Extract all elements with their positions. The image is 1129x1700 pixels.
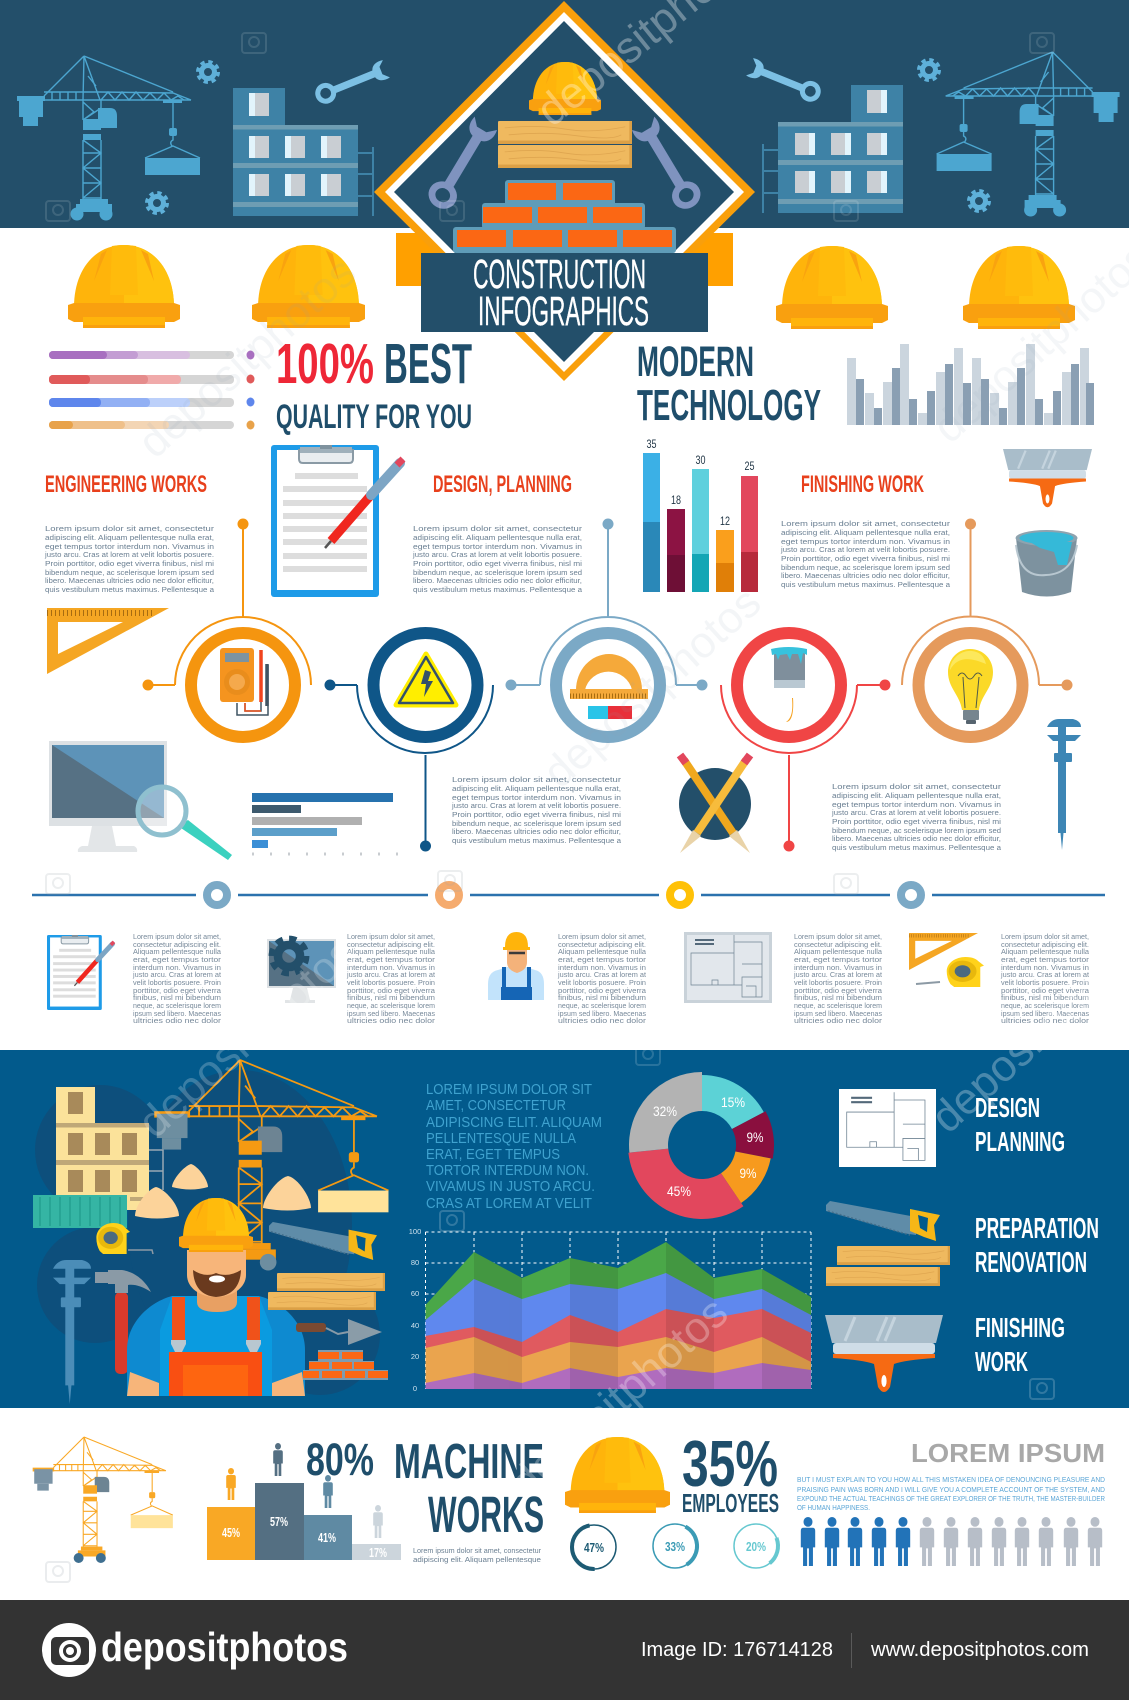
text column 3: ipsum sed libero. Maecenas: [558, 1011, 647, 1018]
icon: caliper: [53, 1260, 91, 1404]
text column 2: consectetur adipiscing elit.: [347, 942, 435, 949]
text column 2: ipsum sed libero. Maecenas: [347, 1011, 436, 1018]
icon: left tower crane: [17, 56, 200, 220]
text column 3: [557, 934, 647, 1025]
heading: 100% best quality for you: BEST: [384, 332, 472, 396]
text column 5: Lorem ipsum dolor sit amet,: [1001, 934, 1089, 941]
heading: modern technology: TECHNOLOGY: [637, 381, 821, 430]
text block: design planning: adipiscing elit. Aliquam pellentesque nulla erat,: [413, 533, 582, 542]
text block: blue paragraph: LOREM IPSUM DOLOR SIT: [426, 1082, 592, 1098]
text block: blue paragraph: PELLENTESQUE NULLA: [426, 1131, 576, 1147]
icon: planks: [268, 1273, 385, 1310]
text column 3: consectetur adipiscing elit.: [558, 942, 646, 949]
text column 3: ultricies odio nec dolor: [558, 1018, 647, 1025]
text column 3: erat, eget tempus tortor: [558, 957, 647, 964]
stacked bar chart: 18: [671, 493, 681, 507]
text block: finishing work: Proin porttitor, odio eget viverra finibus, nisl mi: [781, 554, 950, 563]
ring gauge 33%: [645, 1516, 705, 1576]
text column 4: Aliquam pellentesque nulla: [794, 949, 882, 956]
icon: clipboard with pen: [271, 445, 403, 597]
icon: bottom crane: [33, 1437, 173, 1563]
label: preparation renovation: [975, 1213, 1099, 1279]
text block: lower centre: libero. Maecenas ultricies odio nec dolor efficitur,: [452, 827, 621, 836]
text block: design planning: Lorem ipsum dolor sit amet, consectetur: [413, 524, 583, 533]
text block: finishing work: quis vestibulum metus maximus. Pellentesque a: [781, 580, 951, 589]
text block: design planning: quis vestibulum metus maximus. Pellentesque a: [413, 585, 583, 594]
icon: hammer: [95, 1270, 151, 1374]
text column 4: finibus, nisl mi bibendum: [794, 995, 882, 1002]
text block: blue small caps: OF HUMAN HAPPINESS.: [797, 1503, 870, 1512]
text column 1: neque, ac scelerisque lorem: [133, 1003, 221, 1010]
text block: lower centre: [451, 775, 622, 845]
text column 5: ultricies odio nec dolor: [1001, 1018, 1090, 1025]
icon: hard hat 4: [963, 246, 1075, 329]
icon: monitor with gear: [267, 939, 336, 1003]
icon: planks right: [826, 1246, 950, 1286]
text block: design planning: Proin porttitor, odio eget viverra finibus, nisl mi: [413, 559, 582, 568]
icon: left building: [233, 88, 373, 216]
text column 1: justo arcu. Cras at lorem at: [132, 972, 221, 979]
footer logo: [42, 1623, 348, 1677]
circle node 4: paint brush: [721, 633, 890, 852]
text column 1: Aliquam pellentesque nulla: [133, 949, 221, 956]
watermark texts: depositphotos: [501, 1288, 737, 1507]
text block: lower right: adipiscing elit. Aliquam pellentesque nulla erat,: [832, 791, 1001, 800]
text column 2: velit lobortis posuere. Proin: [347, 980, 435, 987]
icon: orange crane: [154, 1060, 388, 1271]
text block: blue paragraph: TORTOR INTERDUM NON.: [426, 1163, 589, 1179]
panel: blue section: [0, 1050, 1129, 1408]
text column 5: finibus, nisl mi bibendum: [1001, 995, 1089, 1002]
text column 1: consectetur adipiscing elit.: [133, 942, 221, 949]
circle node 3: protractor: [506, 518, 708, 737]
icon: small clipboard: [47, 935, 114, 1010]
circle node 5: light bulb: [902, 518, 1072, 737]
text column 5: erat, eget tempus tortor: [1001, 957, 1090, 964]
stacked area chart: 40: [411, 1321, 419, 1330]
label: design planning: DESIGN: [975, 1092, 1040, 1123]
text column 4: Lorem ipsum dolor sit amet,: [794, 934, 882, 941]
text block: finishing work: libero. Maecenas ultricies odio nec dolor efficitur,: [781, 571, 950, 580]
text column 1: velit lobortis posuere. Proin: [133, 980, 221, 987]
heading: modern technology: [637, 338, 821, 430]
stacked bar chart: [643, 437, 758, 592]
text column 2: justo arcu. Cras at lorem at: [346, 972, 435, 979]
icon: right wrench: [746, 58, 821, 103]
text column 2: erat, eget tempus tortor: [347, 957, 436, 964]
skyline bar chart: [847, 344, 1094, 425]
icon: yellow building: [56, 1087, 163, 1210]
text column 3: Aliquam pellentesque nulla: [558, 949, 646, 956]
footer logo: depositphotos: [101, 1624, 348, 1670]
icon: badge hard hat: [529, 62, 601, 115]
panel: header band: [0, 0, 1129, 228]
icon: worker figure: [127, 1198, 305, 1396]
text block: lower right: libero. Maecenas ultricies odio nec dolor efficitur,: [832, 834, 1001, 843]
text column 4: interdum non. Vivamus in: [794, 965, 882, 972]
text column 2: neque, ac scelerisque lorem: [347, 1003, 435, 1010]
text column 5: [1000, 934, 1090, 1025]
step bar chart with people: 45%: [222, 1526, 240, 1540]
text block: finishing work: adipiscing elit. Aliquam pellentesque nulla erat,: [781, 528, 950, 537]
text block: engineering works: eget tempus tortor interdum non. Vivamus in: [45, 542, 214, 551]
icon: floor plan: [684, 932, 772, 1003]
icon: worker bust: [488, 932, 544, 1000]
label: design planning: PLANNING: [975, 1126, 1065, 1157]
text column 4: porttitor, odio eget viverra: [794, 988, 882, 995]
stacked area chart: [409, 1227, 811, 1393]
stacked area chart: 20: [411, 1352, 419, 1361]
icon: hard hat 3: [776, 246, 888, 329]
ring gauge 47%: 47%: [584, 1540, 604, 1555]
stacked bar chart: 25: [744, 459, 755, 473]
icon: caliper: [1047, 719, 1081, 850]
icon: floor plan white: [839, 1089, 936, 1167]
stacked bar chart: 30: [696, 453, 706, 467]
text column 3: neque, ac scelerisque lorem: [558, 1003, 646, 1010]
text column 3: porttitor, odio eget viverra: [558, 988, 646, 995]
icon: right badge wrench: [631, 116, 703, 211]
heading: finishing work: FINISHING WORK: [801, 471, 924, 498]
text column 4: consectetur adipiscing elit.: [794, 942, 882, 949]
icon: tape measure: [96, 1223, 153, 1254]
text block: machine works caption: [413, 1546, 541, 1564]
heading: 35% employees: [682, 1427, 779, 1518]
title banner: CONSTRUCTION: [473, 251, 646, 297]
stacked bar chart: 12: [720, 514, 730, 528]
text block: lower centre: quis vestibulum metus maximus. Pellentesque a: [452, 836, 622, 845]
label: finishing work: WORK: [975, 1346, 1028, 1377]
text column 4: erat, eget tempus tortor: [794, 957, 883, 964]
icon: set square ruler: [47, 608, 169, 674]
step bar chart with people: 57%: [270, 1515, 288, 1529]
text column 4: justo arcu. Cras at lorem at: [793, 972, 882, 979]
icon: paint scraper right: [825, 1315, 943, 1392]
horizontal bar chart: [252, 793, 402, 854]
text block: lower centre: justo arcu. Cras at lorem at velit lobortis posuere.: [451, 801, 621, 810]
text block: finishing work: [780, 519, 951, 589]
icon: paint scraper: [1003, 449, 1092, 507]
text block: engineering works: libero. Maecenas ultricies odio nec dolor efficitur,: [45, 576, 214, 585]
title banner: INFOGRAPHICS: [478, 288, 649, 334]
text block: blue small caps: [797, 1475, 1106, 1512]
text column 2: interdum non. Vivamus in: [347, 965, 435, 972]
ring gauge 20%: 20%: [746, 1539, 766, 1554]
text block: lower centre: Proin porttitor, odio eget viverra finibus, nisl mi: [452, 810, 621, 819]
text block: machine works caption: Lorem ipsum dolor sit amet, consectetur: [413, 1546, 541, 1555]
icon: left wrench: [315, 60, 390, 105]
text column 1: porttitor, odio eget viverra: [133, 988, 221, 995]
text column 3: Lorem ipsum dolor sit amet,: [558, 934, 646, 941]
text column 2: porttitor, odio eget viverra: [347, 988, 435, 995]
banner side brackets: [396, 233, 733, 286]
text block: lower centre: eget tempus tortor interdum non. Vivamus in: [452, 793, 621, 802]
circle node 2: electrical warning: [324, 633, 493, 852]
heading: 100% best quality for you: 100%: [276, 332, 374, 396]
text column 1: ipsum sed libero. Maecenas: [133, 1011, 222, 1018]
text block: lower centre: Lorem ipsum dolor sit amet, consectetur: [452, 775, 622, 784]
text column 1: interdum non. Vivamus in: [133, 965, 221, 972]
heading: 80% machine works: [306, 1434, 544, 1543]
text column 4: ipsum sed libero. Maecenas: [794, 1011, 883, 1018]
text column 5: justo arcu. Cras at lorem at: [1000, 972, 1089, 979]
watermark texts: depositphotos: [129, 928, 365, 1147]
text column 3: justo arcu. Cras at lorem at: [557, 972, 646, 979]
heading: 80% machine works: MACHINE: [394, 1435, 544, 1489]
panel: footer bar: [0, 1600, 1129, 1700]
text block: lower right: Proin porttitor, odio eget viverra finibus, nisl mi: [832, 817, 1001, 826]
heading: 80% machine works: 80%: [306, 1434, 374, 1485]
heading: 35% employees: 35%: [682, 1427, 778, 1500]
people pictogram row: [801, 1517, 1102, 1566]
text column 5: porttitor, odio eget viverra: [1001, 988, 1089, 995]
donut chart: 15%: [721, 1094, 745, 1110]
icon: hard hat 1: [68, 245, 180, 328]
text column 5: velit lobortis posuere. Proin: [1001, 980, 1089, 987]
title banner: [421, 251, 708, 334]
footer image id: Image ID: 176714128: [641, 1639, 833, 1661]
icon: left badge wrench: [426, 116, 498, 211]
text column 5: interdum non. Vivamus in: [1001, 965, 1089, 972]
stacked area chart: 0: [413, 1384, 417, 1393]
icon: right tower crane: [937, 52, 1120, 216]
icon: teal container: [33, 1195, 127, 1228]
text column 4: velit lobortis posuere. Proin: [794, 980, 882, 987]
label: finishing work: [975, 1312, 1065, 1377]
text block: engineering works: [44, 524, 215, 594]
icon: paint bucket: [1016, 530, 1078, 596]
stacked bar chart: 35: [646, 437, 657, 451]
stacked area chart: 100: [409, 1227, 421, 1236]
text block: engineering works: Proin porttitor, odio eget viverra finibus, nisl mi: [45, 559, 214, 568]
heading: design, planning: DESIGN, PLANNING: [433, 471, 572, 498]
text column 2: Aliquam pellentesque nulla: [347, 949, 435, 956]
text block: design planning: [412, 524, 583, 594]
text column 4: neque, ac scelerisque lorem: [794, 1003, 882, 1010]
heading: 80% machine works: WORKS: [428, 1486, 544, 1543]
donut chart: 9%: [740, 1165, 756, 1181]
text block: finishing work: justo arcu. Cras at lorem at velit lobortis posuere.: [780, 545, 950, 554]
icon: monitor with magnifier: [49, 741, 232, 860]
circle node 1: multimeter: [142, 518, 311, 737]
icon: small brick pile: [303, 1350, 388, 1380]
text block: lower right: quis vestibulum metus maximus. Pellentesque a: [832, 843, 1002, 852]
text column 1: ultricies odio nec dolor: [133, 1018, 222, 1025]
step bar chart with people: [207, 1443, 401, 1560]
label: design planning: [975, 1092, 1065, 1157]
icon: sand piles: [135, 1164, 311, 1218]
heading: engineering works: ENGINEERING WORKS: [45, 471, 207, 498]
watermark texts: [129, 0, 1129, 1507]
icon: crossed pencils: [679, 755, 751, 853]
icon: left lower gear: [147, 193, 167, 213]
watermark texts: depositphotos: [129, 248, 365, 467]
text block: blue paragraph: CRAS AT LOREM AT VELIT: [426, 1196, 592, 1212]
text column 1: [132, 934, 222, 1025]
icon: hard hat 2: [252, 245, 365, 328]
text column 5: consectetur adipiscing elit.: [1001, 942, 1089, 949]
heading: 100% best quality for you: QUALITY FOR YOU: [276, 398, 472, 436]
donut chart: 45%: [667, 1183, 691, 1199]
donut chart: 32%: [653, 1103, 677, 1119]
text block: engineering works: justo arcu. Cras at lorem at velit lobortis posuere.: [44, 550, 214, 559]
text block: lower right: eget tempus tortor interdum non. Vivamus in: [832, 800, 1001, 809]
text column 2: Lorem ipsum dolor sit amet,: [347, 934, 435, 941]
text block: design planning: eget tempus tortor interdum non. Vivamus in: [413, 542, 582, 551]
timeline: [32, 885, 1105, 905]
text block: lower right: bibendum neque, ac scelerisque lorem ipsum sed: [832, 826, 1001, 835]
text column 2: ultricies odio nec dolor: [347, 1018, 436, 1025]
icon: saw: [269, 1222, 377, 1260]
text block: finishing work: bibendum neque, ac scelerisque lorem ipsum sed: [781, 563, 950, 572]
icon: brick pile: [453, 180, 676, 253]
text column 4: ultricies odio nec dolor: [794, 1018, 883, 1025]
icon: stacked planks: [498, 121, 632, 168]
text column 3: velit lobortis posuere. Proin: [558, 980, 646, 987]
text block: lower right: [831, 782, 1002, 852]
ring gauge 47%: [572, 1525, 616, 1569]
icon: right upper gear: [919, 60, 939, 80]
stacked area chart: 60: [411, 1289, 419, 1298]
text block: blue paragraph: ERAT, EGET TEMPUS: [426, 1147, 560, 1163]
icon: ruler and tape measure: [909, 933, 984, 987]
diamond badge: [374, 1, 755, 381]
donut chart: 9%: [746, 1129, 764, 1145]
text column 1: Lorem ipsum dolor sit amet,: [133, 934, 221, 941]
step bar chart with people: 17%: [369, 1546, 387, 1560]
text block: blue paragraph: ADIPISCING ELIT. ALIQUAM: [426, 1115, 602, 1131]
text block: design planning: bibendum neque, ac scelerisque lorem ipsum sed: [413, 568, 582, 577]
text block: blue paragraph: VIVAMUS IN JUSTO ARCU.: [426, 1179, 595, 1195]
icon: trowel: [296, 1319, 382, 1345]
label: finishing work: FINISHING: [975, 1312, 1065, 1343]
text column 4: [793, 934, 883, 1025]
heading: 35% employees: EMPLOYEES: [682, 1488, 779, 1518]
text block: finishing work: eget tempus tortor interdum non. Vivamus in: [781, 537, 950, 546]
text column 3: finibus, nisl mi bibendum: [558, 995, 646, 1002]
text block: lower right: justo arcu. Cras at lorem at velit lobortis posuere.: [831, 808, 1001, 817]
icon: right building: [763, 85, 903, 213]
icon: left upper gear: [198, 62, 218, 82]
text block: design planning: libero. Maecenas ultricies odio nec dolor efficitur,: [413, 576, 582, 585]
text column 5: Aliquam pellentesque nulla: [1001, 949, 1089, 956]
watermark texts: depositphotos: [534, 578, 770, 797]
ring gauge 33%: 33%: [665, 1539, 685, 1554]
text column 5: neque, ac scelerisque lorem: [1001, 1003, 1089, 1010]
text column 5: ipsum sed libero. Maecenas: [1001, 1011, 1090, 1018]
text block: lower centre: adipiscing elit. Aliquam pellentesque nulla erat,: [452, 784, 621, 793]
text column 2: [346, 934, 436, 1025]
text block: engineering works: Lorem ipsum dolor sit amet, consectetur: [45, 524, 215, 533]
ring gauge 20%: [728, 1518, 784, 1574]
heading: modern technology: MODERN: [637, 338, 754, 386]
text block: blue paragraph: [426, 1082, 602, 1212]
text block: lower right: Lorem ipsum dolor sit amet, consectetur: [832, 782, 1002, 791]
text column 1: finibus, nisl mi bibendum: [133, 995, 221, 1002]
text block: lower centre: bibendum neque, ac scelerisque lorem ipsum sed: [452, 819, 621, 828]
icon: right lower gear: [969, 191, 989, 211]
text block: design planning: justo arcu. Cras at lorem at velit lobortis posuere.: [412, 550, 582, 559]
text column 1: erat, eget tempus tortor: [133, 957, 222, 964]
text block: machine works caption: adipiscing elit. Aliquam pellentesque: [413, 1555, 541, 1564]
text column 3: interdum non. Vivamus in: [558, 965, 646, 972]
text column 2: finibus, nisl mi bibendum: [347, 995, 435, 1002]
text block: engineering works: quis vestibulum metus maximus. Pellentesque a: [45, 585, 215, 594]
progress bars: [49, 350, 254, 430]
text block: engineering works: adipiscing elit. Aliquam pellentesque nulla erat,: [45, 533, 214, 542]
icon: saw right: [826, 1201, 940, 1241]
donut chart: [628, 1072, 774, 1219]
text block: blue paragraph: AMET, CONSECTETUR: [426, 1098, 566, 1114]
stacked area chart: 80: [411, 1258, 419, 1267]
heading: lorem ipsum: LOREM IPSUM: [911, 1438, 1105, 1468]
step bar chart with people: 41%: [318, 1531, 336, 1545]
text block: engineering works: bibendum neque, ac scelerisque lorem ipsum sed: [45, 568, 214, 577]
icon: large hard hat: [565, 1437, 670, 1513]
scene backdrop blobs: [35, 1070, 380, 1395]
footer url: www.depositphotos.com: [870, 1639, 1089, 1661]
text block: finishing work: Lorem ipsum dolor sit amet, consectetur: [781, 519, 951, 528]
heading: 100% best quality for you: [276, 332, 472, 436]
